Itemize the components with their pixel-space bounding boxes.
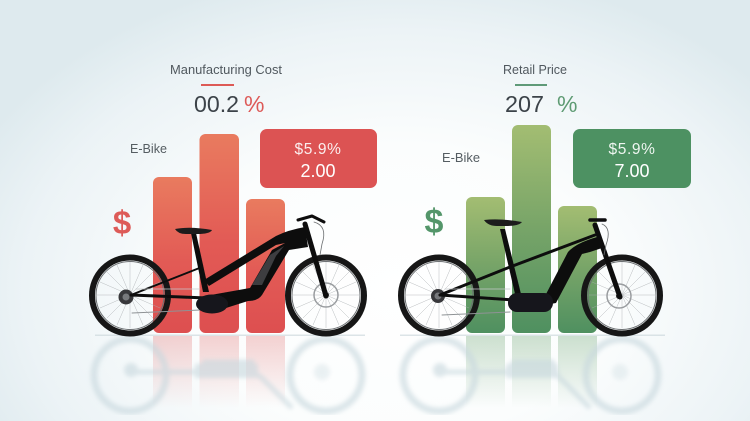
- battery detail: [252, 246, 284, 285]
- icon: dollar sign: $: [425, 203, 444, 241]
- label: e-bike: E-Bike: [130, 141, 167, 156]
- accent line: [201, 84, 234, 86]
- saddle: [484, 219, 522, 226]
- percentage value: 207: [505, 91, 544, 117]
- panel: retail price: [400, 62, 691, 411]
- callout: 2.00: [300, 161, 336, 181]
- rear wheel: [92, 258, 168, 334]
- motor: [196, 294, 228, 314]
- bar chart: [153, 134, 285, 333]
- callout: [573, 129, 691, 188]
- heading: manufacturing cost: Manufacturing Cost: [170, 62, 282, 77]
- bike: manufacturing: [92, 216, 364, 334]
- percentage value: [505, 91, 577, 117]
- seat tube: [191, 233, 209, 292]
- seat tube: [500, 229, 521, 294]
- bike: retail: [401, 219, 660, 334]
- heading: retail price: Retail Price: [503, 62, 567, 77]
- icon: dollar sign: $: [113, 204, 131, 241]
- panel: manufacturing cost: [92, 62, 377, 411]
- chain and stays: [440, 235, 595, 315]
- motor: [508, 293, 553, 312]
- frame: [545, 237, 602, 305]
- bar chart: [466, 125, 597, 333]
- frame: [204, 227, 308, 308]
- chain and stays: [131, 267, 207, 313]
- percentage value: %: [244, 91, 264, 117]
- percentage value: 00.2: [194, 91, 239, 117]
- saddle: [175, 228, 212, 234]
- reflection: [403, 336, 658, 411]
- accent line: [515, 84, 547, 86]
- reflection: [94, 336, 362, 411]
- front wheel: [288, 258, 364, 334]
- percentage value: [194, 91, 264, 117]
- front wheel: [584, 258, 660, 334]
- callout: $5.9%: [295, 141, 341, 158]
- callout: $5.9%: [609, 141, 655, 158]
- fork and handlebar: [590, 220, 620, 297]
- ground line: [95, 334, 365, 336]
- fork and handlebar: [298, 216, 326, 296]
- rear wheel: [401, 258, 477, 334]
- label: e-bike: E-Bike: [442, 150, 480, 165]
- callout: [260, 129, 377, 188]
- ground line: [400, 334, 665, 336]
- callout: 7.00: [614, 161, 650, 181]
- percentage value: %: [557, 91, 577, 117]
